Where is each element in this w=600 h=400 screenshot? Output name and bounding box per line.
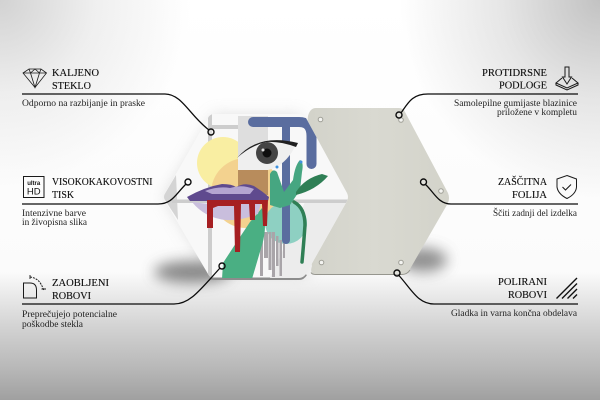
callout: zaobljeni robovi: ROBOVI	[52, 291, 91, 302]
dark green ring and drip	[294, 202, 305, 262]
callout: zaobljeni robovi: Preprečujejo potencialne	[22, 309, 117, 319]
teal circle	[265, 202, 307, 244]
brown block	[238, 170, 268, 195]
callout: visokokakovostni tisk	[22, 176, 153, 227]
blue nails	[276, 160, 302, 168]
callout lines	[22, 94, 578, 304]
left bevel	[163, 175, 178, 220]
callout: polirani robovi: POLIRANI	[498, 277, 548, 288]
callout: zaščitna folija: Ščiti zadnji del izdelka	[493, 208, 577, 218]
callout: zaobljeni robovi	[22, 275, 117, 329]
callout: zaobljeni robovi: poškodbe stekla	[22, 319, 83, 329]
callout: zaobljeni robovi: ZAOBLJENI	[52, 278, 110, 289]
callout: polirani robovi: ROBOVI	[508, 290, 547, 301]
halo behind panels	[163, 114, 347, 278]
icon: shield	[557, 176, 576, 198]
callout: protidrsne podloge: PROTIDRSNE	[482, 68, 547, 79]
callout: kaljeno steklo: KALJENO	[52, 68, 99, 79]
callout: visokokakovostni tisk: in živopisna slika	[22, 217, 87, 227]
callout: polirani robovi	[451, 277, 577, 318]
callout: kaljeno steklo	[22, 68, 145, 108]
lips	[187, 184, 269, 220]
callout anchors	[185, 112, 426, 276]
callout: visokokakovostni tisk: Intenzivne barve	[22, 208, 86, 218]
right glass tone	[270, 200, 350, 278]
gray drips	[260, 232, 285, 277]
icon: ultra HD: ultra	[27, 181, 41, 187]
green hand	[270, 160, 303, 208]
callout: zaščitna folija: ZAŠČITNA	[498, 176, 547, 188]
yellow circle	[197, 137, 238, 186]
callout: protidrsne podloge: Samolepilne gumijaste blazinice	[454, 98, 577, 108]
green leaf finger	[296, 174, 328, 195]
icon: polished edge	[556, 278, 577, 298]
icon: ultra HD: HD	[27, 186, 41, 198]
callout: protidrsne podloge: PODLOGE	[499, 80, 547, 92]
mounting holes	[318, 117, 443, 265]
icon: anti-slip pad	[556, 67, 578, 90]
icon: diamond	[23, 69, 46, 88]
icon: rounded corner	[24, 275, 46, 298]
orange circle	[212, 159, 274, 228]
back panel	[300, 108, 449, 274]
callout: kaljeno steklo: Odporno na razbijanje in praske	[22, 98, 145, 108]
callout: visokokakovostni tisk: TISK	[52, 190, 74, 201]
callout: visokokakovostni tisk: VISOKOKAKOVOSTNI	[52, 177, 153, 188]
shadow: back panel	[399, 248, 447, 272]
callout: zaščitna folija	[493, 176, 577, 218]
callout: polirani robovi: Gladka in varna končna obdelava	[451, 308, 577, 318]
callout: protidrsne podloge: priložene v kompletu	[497, 107, 578, 117]
icon: ultra HD	[24, 176, 44, 198]
front glass panel with artwork	[163, 114, 350, 280]
eye	[237, 140, 298, 170]
red paint drips	[207, 200, 268, 252]
callout: zaščitna folija: FOLIJA	[512, 190, 547, 201]
shadow: front panel	[154, 261, 230, 283]
paper patch behind eye	[238, 116, 268, 157]
callout: protidrsne podloge	[454, 67, 578, 117]
green arm	[222, 208, 265, 279]
glass grid lines	[172, 114, 348, 279]
callout: kaljeno steklo: STEKLO	[52, 81, 91, 92]
blue paint	[253, 122, 312, 240]
